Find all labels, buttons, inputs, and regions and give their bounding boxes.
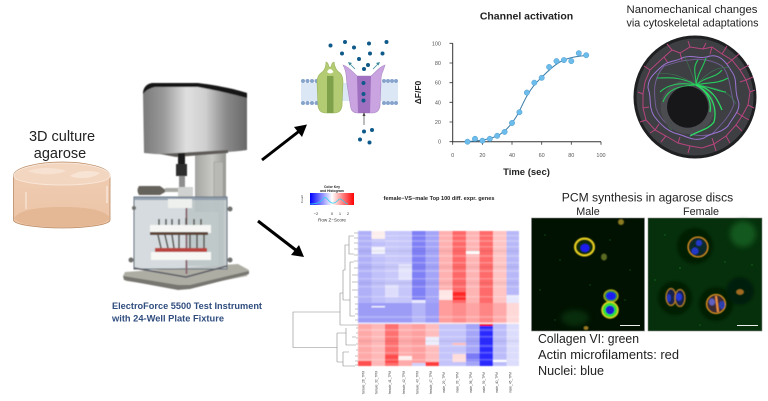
text: 3D culture agarose label: agarose: [34, 146, 86, 162]
colour key: Count: [300, 195, 304, 203]
tick labels: 100: [432, 41, 441, 47]
icon: ion channels in membrane: [301, 40, 398, 144]
sample labels: [361, 370, 513, 394]
scale bar: [620, 325, 640, 326]
colour key: [300, 185, 354, 222]
axes: [453, 43, 601, 142]
sample labels: male_45_TPM: [509, 372, 513, 393]
legend: stain colours: [538, 332, 679, 378]
diagram: cell cytoskeleton: [634, 36, 756, 158]
line chart: fluorescence over time: 20: [479, 153, 485, 159]
colour key: and Histogram: [320, 189, 344, 193]
top cluster: [358, 231, 372, 303]
base plate: [123, 264, 249, 288]
pins: [158, 218, 204, 249]
text: 3D culture agarose label: 3D culture: [29, 129, 95, 145]
heading: nanomechanical changes: Nanomechanical changes: [626, 4, 758, 16]
green intermediate filaments: [657, 58, 728, 102]
scale bar: [737, 325, 758, 326]
sample labels: female_42_TPM: [402, 370, 406, 394]
tick labels: 40: [435, 100, 441, 106]
legend: stain colours: Actin microfilaments: red: [538, 348, 679, 362]
purple channel: [343, 65, 385, 113]
line chart: fluorescence over time: [413, 41, 606, 178]
colour key: Color Key: [324, 185, 340, 189]
dendrogram: [293, 233, 358, 366]
row stripes: [358, 235, 519, 360]
male cell 3: [602, 302, 618, 318]
sample labels: female_47_TPM: [429, 370, 433, 394]
colour key: Row Z−Score: [318, 218, 346, 222]
label: female: Female: [683, 206, 719, 218]
tick labels: 0: [438, 140, 441, 146]
heatmap cells: [358, 231, 519, 366]
colour key: 2: [347, 211, 350, 216]
notable cells: [452, 292, 466, 300]
tick labels: 20: [435, 120, 441, 126]
line chart: fluorescence over time: 100: [596, 153, 606, 159]
legend: stain colours: Nuclei: blue: [538, 364, 604, 378]
ions: [328, 40, 388, 144]
colour key: 0: [331, 211, 334, 216]
axis titles: Time (sec): [503, 167, 550, 178]
male cell 2: [604, 290, 618, 302]
line chart: fluorescence over time: 0: [451, 153, 454, 159]
sample labels: male_33_TPM: [456, 372, 460, 393]
colour key: −2: [314, 211, 319, 216]
line chart: fluorescence over time: 40: [509, 153, 515, 159]
female cell 3: [706, 294, 726, 314]
heatmap title: female−VS−male Top 100 diff. expr. genes: [384, 196, 494, 202]
sample labels: female_32_TPM: [375, 370, 379, 394]
support column: [195, 150, 226, 212]
female cell 2: [666, 288, 676, 306]
line chart: fluorescence over time: ΔF/F0: [413, 80, 423, 104]
lower cluster: [358, 324, 372, 366]
arrow: to gene expression and PCM: [258, 221, 304, 257]
text: instrument caption: with 24-Well Plate Fixture: [111, 314, 224, 324]
sample labels: female_26_TPM: [361, 370, 365, 394]
nucleus halo: [661, 80, 715, 134]
steel head: [143, 84, 247, 155]
legend: stain colours: Collagen VI: green: [538, 332, 639, 346]
actin network: [638, 41, 755, 153]
data points: [465, 50, 589, 144]
label: male: Male: [576, 206, 600, 218]
membrane: [301, 83, 398, 101]
micrograph: female: [648, 218, 762, 331]
side load cell: [138, 186, 167, 195]
stray signal: [575, 219, 624, 330]
tick labels: [432, 41, 441, 146]
sample labels: male_40_TPM: [495, 372, 499, 393]
heading: PCM synthesis: PCM synthesis in agarose discs: [562, 190, 733, 204]
image: ElectroForce test instrument: [123, 83, 249, 290]
middle cluster: [358, 303, 439, 324]
sample labels: male_39_TPM: [482, 372, 486, 393]
fit curve: [468, 56, 586, 142]
nucleus: [667, 86, 708, 128]
flow arrows: [363, 113, 365, 125]
sample labels: female_43_TPM: [415, 370, 419, 394]
heading: nanomechanical changes: via cytoskeletal adaptations: [626, 18, 759, 30]
heading: channel activation: Channel activation: [480, 10, 573, 22]
icon: agarose disc: [14, 162, 110, 228]
male cell 1: [575, 238, 594, 256]
actuator rod: [178, 153, 185, 166]
sample labels: male_29_TPM: [442, 372, 446, 393]
upper plate: [150, 225, 211, 233]
tick labels: 80: [435, 61, 441, 67]
line chart: fluorescence over time: 80: [568, 153, 574, 159]
microtubule ring: [648, 56, 739, 139]
heatmap figure: [293, 185, 519, 394]
text: instrument caption: ElectroForce 5500 Test Instrument: [112, 301, 263, 312]
lower plate with red wells: [155, 248, 207, 253]
tick labels: 60: [435, 81, 441, 87]
sample labels: female_41_TPM: [388, 370, 392, 394]
green channel: [317, 62, 343, 113]
knobs: [128, 206, 232, 262]
clear chamber: [134, 197, 227, 269]
line chart: fluorescence over time: 60: [539, 153, 545, 159]
micrograph: male: [532, 218, 644, 331]
arrow: to channel activation: [262, 124, 307, 160]
colour key: 1: [339, 211, 342, 216]
female cell 4: [736, 289, 744, 295]
sample labels: male_36_TPM: [469, 372, 473, 393]
faint green filaments: [656, 56, 736, 130]
female cell 1: [688, 237, 708, 257]
